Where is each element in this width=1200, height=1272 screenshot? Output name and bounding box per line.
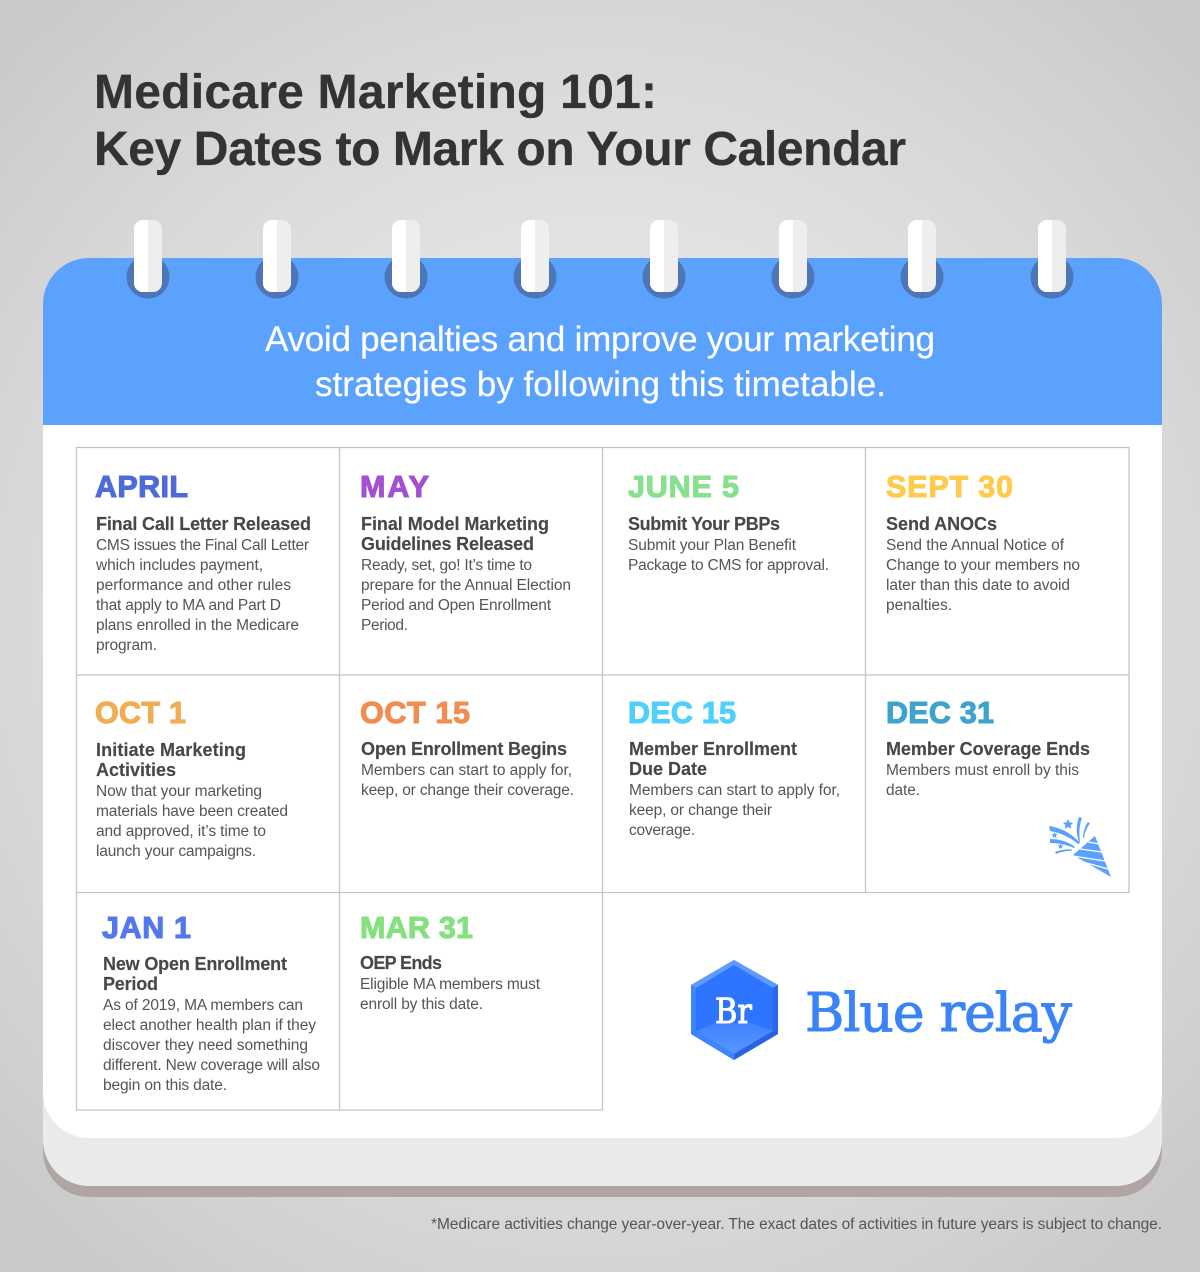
cell: Dec 15 [628, 696, 840, 839]
cell: April: CMS issues the Final Call Letter [96, 537, 309, 554]
cell: Dec 15: coverage. [629, 822, 695, 839]
cell: June 5: Submit your Plan Benefit [628, 537, 797, 554]
cell: Jan 1: Period [103, 974, 158, 994]
logo: Blue relay: Blue relay [805, 981, 1073, 1044]
cell: Mar 31 [360, 911, 541, 1013]
cell: May: prepare for the Annual Election [361, 577, 571, 594]
cell: Sept 30: Change to your members no [886, 557, 1080, 574]
cell: Oct 1: OCT 1 [95, 696, 186, 730]
cell: May: MAY [360, 470, 429, 504]
cell: Oct 1: launch your campaigns. [96, 843, 256, 860]
cell: Oct 1: Now that your marketing [96, 783, 262, 800]
cell: Sept 30: Send ANOCs [886, 514, 997, 534]
cell: Jan 1: discover they need something [103, 1037, 308, 1054]
cell: Mar 31: enroll by this date. [360, 996, 483, 1013]
cell: Jan 1: New Open Enrollment [103, 954, 287, 974]
cell: Oct 15: keep, or change their coverage. [361, 782, 574, 799]
cell: May: Guidelines Released [361, 534, 534, 554]
cell: April: APRIL [95, 470, 188, 504]
cell: April: program. [96, 637, 157, 654]
subtitle [265, 320, 935, 404]
cell: Dec 31 [886, 696, 1090, 799]
cell: May: Ready, set, go! It’s time to [361, 557, 532, 574]
footnote: *Medicare activities change year-over-year. The exact dates of activities in future years is subject to change. [431, 1216, 1162, 1233]
cell: Sept 30: SEPT 30 [886, 470, 1013, 504]
cell: Dec 15: Member Enrollment [629, 739, 797, 759]
cell: Mar 31: Eligible MA members must [360, 976, 541, 993]
cell: Jan 1 [102, 911, 320, 1094]
cell: April: plans enrolled in the Medicare [96, 617, 299, 634]
cell: April: performance and other rules [96, 577, 291, 594]
cell: Sept 30: Send the Annual Notice of [886, 537, 1065, 554]
title: Medicare Marketing 101: [94, 66, 657, 119]
calendar body [43, 258, 1162, 1197]
cell: Sept 30: penalties. [886, 597, 952, 614]
icon: party popper [1049, 817, 1111, 877]
spiral binding rings [126, 220, 1074, 298]
title [94, 66, 906, 176]
cell: Mar 31: MAR 31 [360, 911, 473, 945]
cell: Dec 15: DEC 15 [628, 696, 736, 730]
cell: June 5: Package to CMS for approval. [628, 557, 829, 574]
cell: Dec 15: keep, or change their [629, 802, 772, 819]
cell: Dec 31: date. [886, 782, 920, 799]
cell: Jan 1: As of 2019, MA members can [103, 997, 303, 1014]
cell: Oct 1: Activities [96, 760, 176, 780]
cell: Oct 1: materials have been created [96, 803, 288, 820]
cell: June 5 [628, 470, 829, 574]
cell: Sept 30: later than this date to avoid [886, 577, 1070, 594]
cell: Dec 15: Members can start to apply for, [629, 782, 840, 799]
cell: Dec 31: Member Coverage Ends [886, 739, 1090, 759]
cell: April: that apply to MA and Part D [96, 597, 281, 614]
cell: Jan 1: elect another health plan if they [103, 1017, 316, 1034]
icon: hexagon: Br [715, 992, 752, 1032]
cell: June 5: JUNE 5 [628, 470, 739, 504]
cell: May: Final Model Marketing [361, 514, 549, 534]
icon: hexagon [691, 960, 778, 1060]
cell: Sept 30 [886, 470, 1080, 614]
cell: June 5: Submit Your PBPs [628, 514, 780, 534]
cell: April: Final Call Letter Released [96, 514, 311, 534]
cell: Jan 1: begin on this date. [103, 1077, 227, 1094]
cell: Oct 15 [360, 696, 574, 799]
cell: May: Period and Open Enrollment [361, 597, 552, 614]
cell: May: Period. [361, 617, 408, 634]
cell: April [95, 470, 311, 654]
title: Key Dates to Mark on Your Calendar [94, 123, 906, 176]
cell: Dec 15: Due Date [629, 759, 707, 779]
cell: Mar 31: OEP Ends [360, 953, 442, 973]
cell: Oct 1: Initiate Marketing [96, 740, 246, 760]
cell: Oct 15: Open Enrollment Begins [361, 739, 567, 759]
cell: May [360, 470, 571, 634]
cell: April: which includes payment, [95, 557, 263, 574]
cell: Oct 15: OCT 15 [360, 696, 470, 730]
cell: Jan 1: JAN 1 [102, 911, 191, 945]
logo: Blue relay [691, 960, 1073, 1060]
subtitle: strategies by following this timetable. [315, 365, 886, 404]
cell: Dec 31: Members must enroll by this [886, 762, 1079, 779]
cell: Dec 31: DEC 31 [886, 696, 994, 730]
cell: Oct 1: and approved, it’s time to [96, 823, 266, 840]
cell: Jan 1: different. New coverage will also [103, 1057, 320, 1074]
cell: Oct 15: Members can start to apply for, [361, 762, 572, 779]
cell: Oct 1 [95, 696, 288, 860]
subtitle: Avoid penalties and improve your marketing [265, 320, 935, 359]
